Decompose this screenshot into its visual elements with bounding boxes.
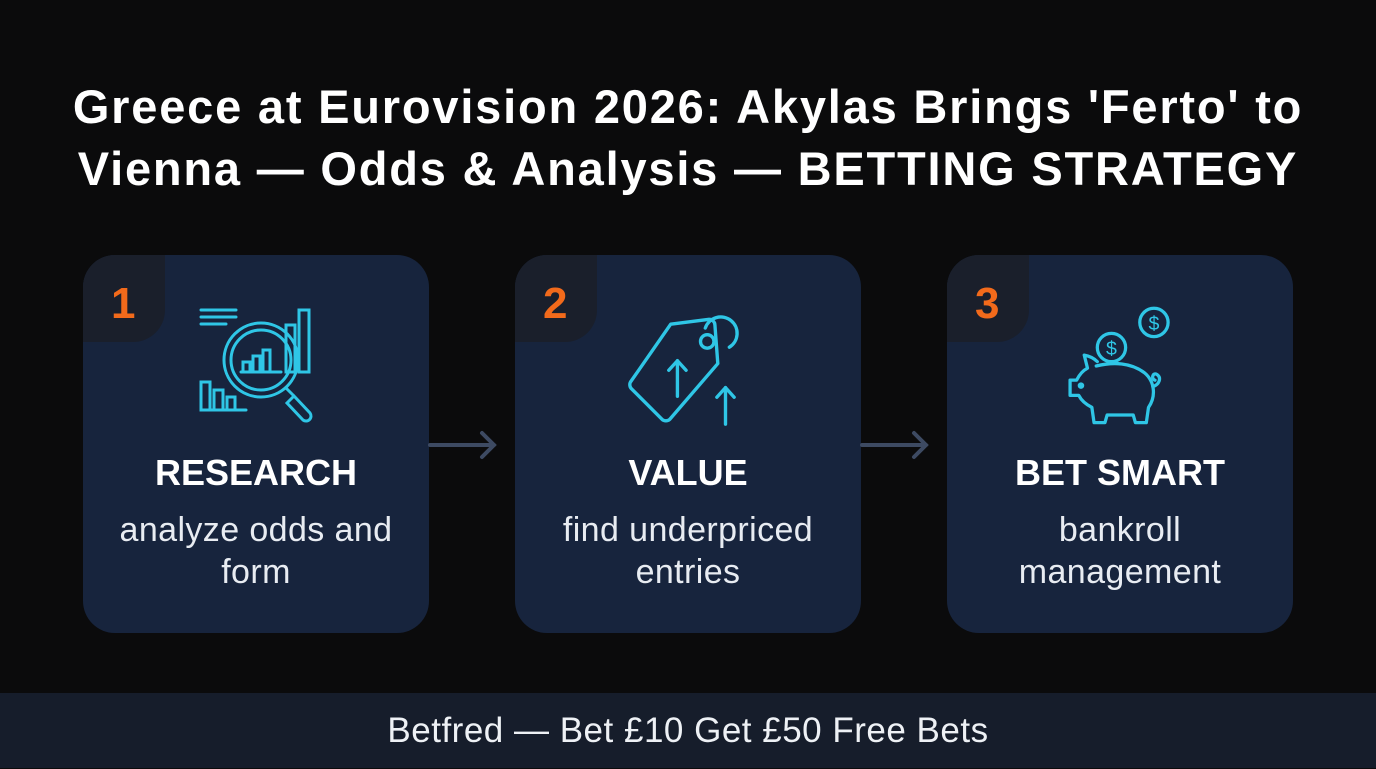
description xyxy=(120,511,392,591)
description xyxy=(1019,511,1221,591)
description: bankroll xyxy=(1059,511,1181,549)
icon: piggy bank: $ xyxy=(1148,313,1159,335)
description: analyze odds and xyxy=(120,511,392,549)
icon: price tag xyxy=(628,315,739,426)
arrow 1 xyxy=(428,430,497,459)
heading: VALUE xyxy=(628,452,748,493)
icon: piggy bank xyxy=(1068,306,1170,424)
panel: research xyxy=(83,255,429,633)
description: find underpriced xyxy=(563,511,813,549)
icon: magnifier chart xyxy=(200,308,312,422)
badge 2: 2 xyxy=(543,279,567,328)
description: entries xyxy=(636,553,740,591)
description: form xyxy=(221,553,291,591)
badge 3: 3 xyxy=(975,279,999,328)
heading: BET SMART xyxy=(1015,452,1225,493)
badge 2 xyxy=(515,255,597,342)
panel: value xyxy=(515,255,861,633)
footer banner: Betfred — Bet £10 Get £50 Free Bets xyxy=(387,711,989,750)
title xyxy=(73,80,1303,195)
description xyxy=(563,511,813,591)
arrow 2 xyxy=(860,430,929,459)
panel: bet smart xyxy=(947,255,1293,633)
title: Vienna — Odds & Analysis — BETTING STRATEGY xyxy=(78,142,1298,195)
badge 3 xyxy=(947,255,1029,342)
badge 1 xyxy=(83,255,165,342)
title: Greece at Eurovision 2026: Akylas Brings 'Ferto' to xyxy=(73,80,1303,133)
badge 1: 1 xyxy=(111,279,135,328)
footer banner xyxy=(0,693,1376,768)
description: management xyxy=(1019,553,1221,591)
icon: piggy bank: $ xyxy=(1106,338,1117,360)
heading: RESEARCH xyxy=(155,452,357,493)
